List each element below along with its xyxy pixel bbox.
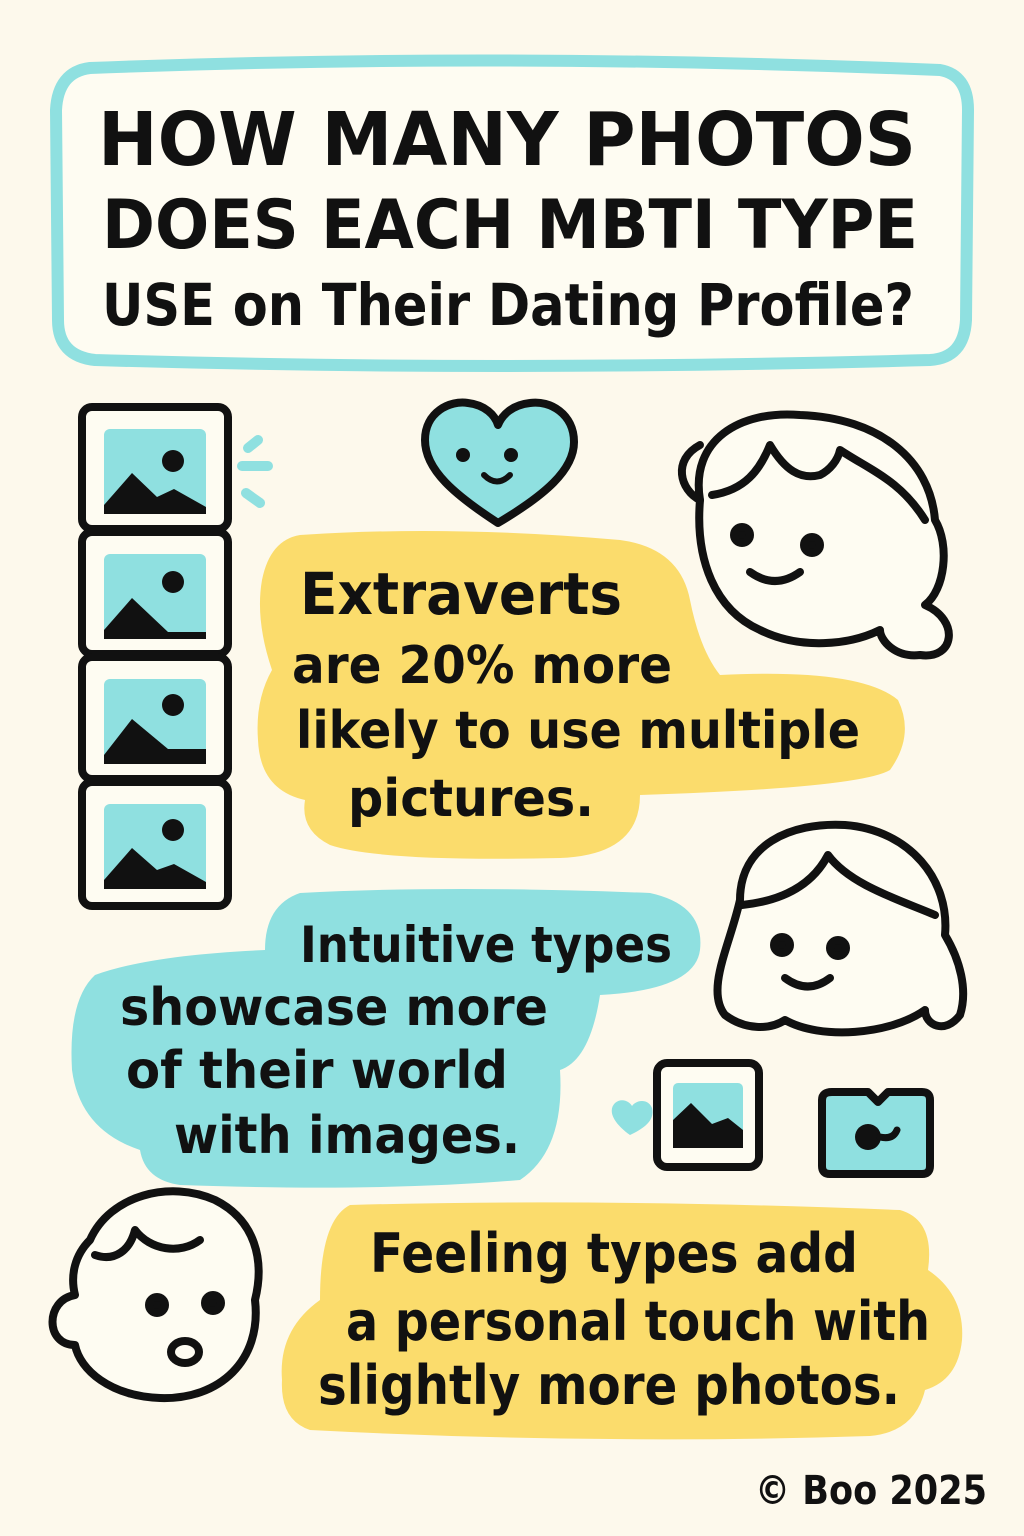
- icon: camera folder: [822, 1092, 930, 1174]
- icon: small photo frame: [657, 1063, 759, 1167]
- callout text: pictures.: [348, 769, 594, 829]
- callout text: of their world: [126, 1041, 508, 1101]
- title text: DOES EACH MBTI TYPE: [102, 186, 918, 265]
- callout text: Extraverts: [300, 560, 622, 628]
- callout text: [292, 560, 860, 829]
- icon: heart face: [425, 403, 574, 523]
- photo strip: [82, 407, 228, 906]
- callout text: are 20% more: [292, 636, 672, 696]
- callout text: [318, 1222, 930, 1417]
- callout text: slightly more photos.: [318, 1354, 900, 1417]
- title text: HOW MANY PHOTOS: [98, 97, 916, 183]
- sparkle marks: [242, 440, 268, 503]
- callout text: a personal touch with: [346, 1290, 930, 1353]
- callout text: showcase more: [120, 978, 548, 1038]
- callout: extraverts: [258, 531, 905, 859]
- callout text: Feeling types add: [370, 1222, 858, 1285]
- callout text: likely to use multiple: [296, 701, 860, 761]
- callout: feeling: [282, 1202, 962, 1439]
- callout text: [120, 916, 672, 1166]
- copyright: © Boo 2025: [755, 1468, 987, 1514]
- title text: USE on Their Dating Profile?: [102, 271, 914, 339]
- icon: boy face: [52, 1191, 259, 1398]
- callout text: Intuitive types: [300, 916, 672, 974]
- title box: [56, 60, 968, 366]
- title text: [98, 97, 918, 339]
- callout text: with images.: [174, 1106, 520, 1166]
- icon: small heart: [612, 1100, 653, 1135]
- callout: intuitive: [71, 889, 700, 1188]
- icon: girl face 2: [717, 825, 963, 1032]
- icon: girl face 1: [682, 414, 949, 655]
